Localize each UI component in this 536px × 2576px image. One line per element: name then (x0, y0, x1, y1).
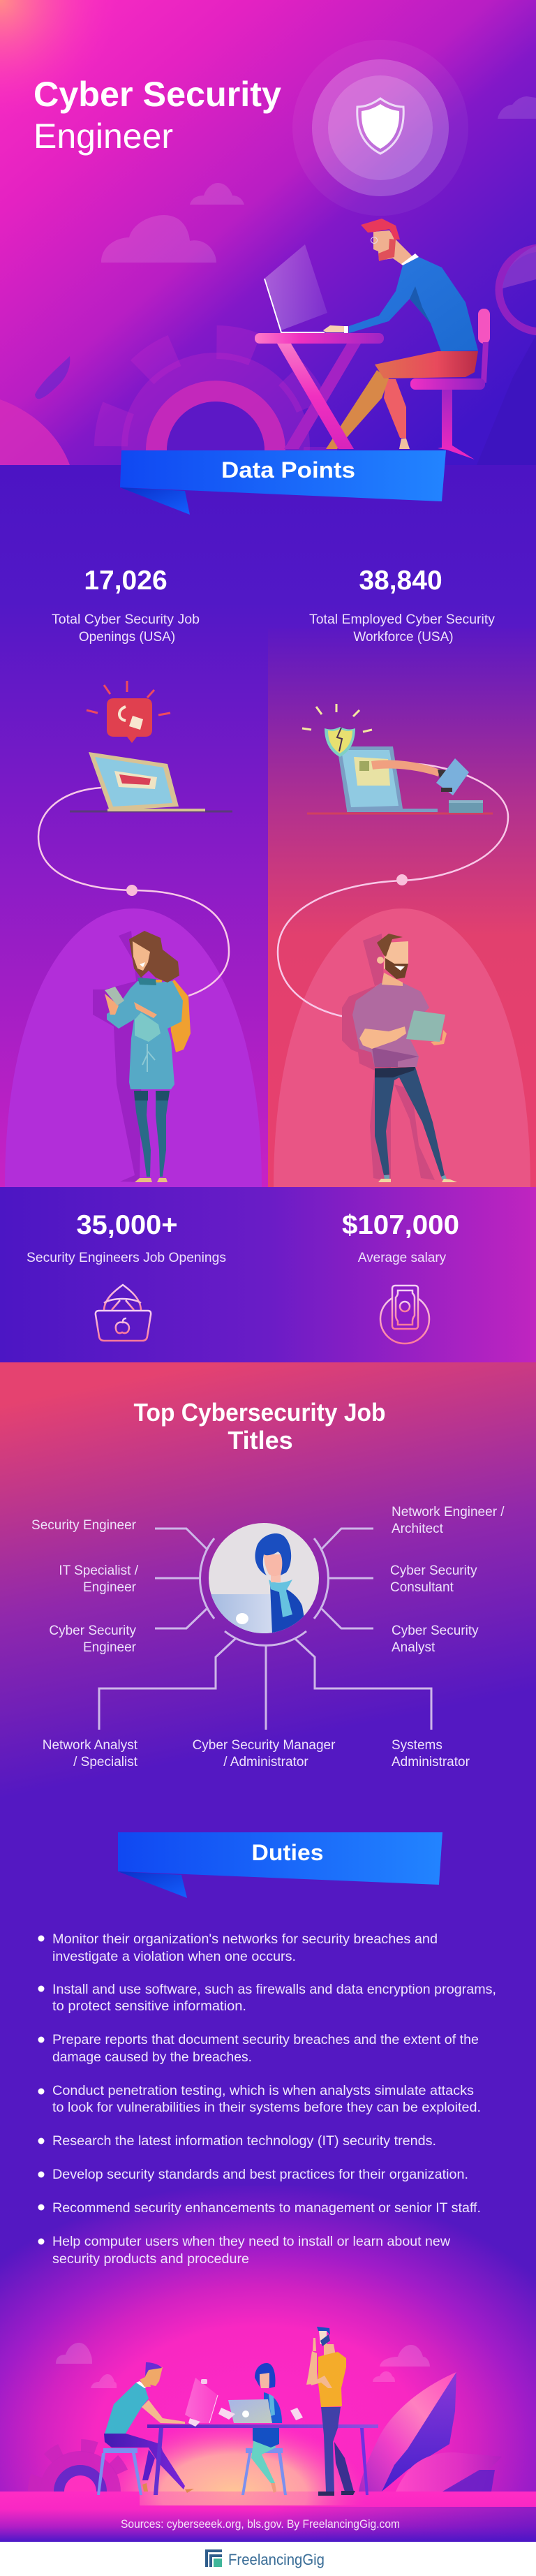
stat: security engineers openings: 35,000+ (77, 1210, 177, 1240)
stat: average salary (342, 1210, 459, 1265)
portrait: woman at laptop in circle (209, 1523, 319, 1634)
labels: bottom job titles (43, 1738, 470, 1769)
duties list: damage caused by the breaches. (52, 2050, 252, 2065)
title: Cyber Security (34, 75, 281, 114)
chair (410, 309, 490, 459)
labels: bottom job titles: Systems (392, 1738, 442, 1753)
table top and legs (147, 2424, 378, 2495)
icon: money on phone (380, 1286, 429, 1344)
heading: top job titles: Top Cybersecurity Job (134, 1398, 385, 1427)
floating papers (188, 2408, 303, 2427)
clouds (101, 96, 536, 263)
duties list: to look for vulnerabilities in their systems before they can be exploited. (52, 2100, 481, 2115)
stat: average salary: Average salary (358, 1251, 447, 1265)
stat: total job openings: Openings (USA) (79, 630, 175, 645)
section background: hero (0, 0, 536, 465)
labels: right job titles: Network Engineer / (392, 1505, 505, 1519)
section background: stats band (0, 1187, 536, 1362)
sources line: Sources: cyberseeek.org, bls.gov. By FreelancingGig.com (121, 2517, 400, 2531)
man body (323, 219, 478, 378)
connector curves with nodes (38, 764, 508, 1018)
illustration: laptop with alert (70, 752, 232, 811)
duties list: to protect sensitive information. (52, 1999, 246, 2014)
arch backgrounds (5, 908, 530, 1187)
labels: right job titles: Analyst (392, 1640, 436, 1655)
labels: right job titles (390, 1505, 505, 1655)
labels: bottom job titles: Network Analyst (43, 1738, 138, 1753)
icon: hooded hacker behind laptop (96, 1285, 151, 1341)
labels: left job titles (31, 1518, 139, 1655)
labels: bottom job titles: / Specialist (73, 1755, 138, 1769)
stat: average salary: $107,000 (342, 1210, 459, 1240)
illustration: man working at laptop (255, 219, 490, 459)
illustration: man with tablet (342, 934, 457, 1182)
floating screen (185, 2378, 218, 2423)
duties list: Install and use software, such as firewalls and data encryption programs, (52, 1982, 496, 1997)
stat: total employed workforce: 38,840 (359, 566, 442, 596)
footer ground (0, 2492, 536, 2542)
background gears and arcs (0, 246, 536, 552)
standing man (306, 2327, 355, 2496)
labels: bottom job titles: Cyber Security Manager (193, 1738, 336, 1753)
icon: shield in concentric circles (292, 40, 468, 216)
labels: right job titles: Consultant (390, 1580, 454, 1595)
stat: security engineers openings: Security Engineers Job Openings (27, 1251, 226, 1265)
logo: FreelancingGig: FreelancingGig (228, 2551, 325, 2568)
footer white strip (0, 2542, 536, 2576)
title: Engineer (34, 117, 173, 156)
icon: hacked padlock alert (87, 681, 170, 743)
duties list: Conduct penetration testing, which is when analysts simulate attacks (52, 2084, 474, 2098)
duties list: security products and procedure (52, 2252, 249, 2267)
banner: Data Points: Data Points (221, 457, 355, 483)
illustration: hacker arm stealing data from laptop (307, 746, 493, 814)
stat: security engineers openings (27, 1210, 226, 1265)
stat: total job openings: Total Cyber Security Job (52, 612, 200, 627)
laptop (265, 244, 327, 332)
stat: total job openings: 17,026 (84, 566, 168, 596)
stat: total employed workforce: Workforce (USA) (353, 630, 454, 645)
footer gear (44, 2439, 128, 2492)
icon: broken shield with rays (302, 704, 372, 757)
heading: top job titles: Titles (228, 1426, 293, 1455)
illustration: woman with phone and backpack (93, 931, 191, 1182)
duties list: Recommend security enhancements to management or senior IT staff. (52, 2201, 481, 2216)
duties list: Research the latest information technology (IT) security trends. (52, 2134, 436, 2149)
labels: left job titles: Security Engineer (31, 1518, 137, 1533)
section background: job titles (0, 1362, 536, 1823)
labels: left job titles: Engineer (83, 1580, 137, 1595)
labels: bottom job titles: / Administrator (223, 1755, 308, 1769)
labels: bottom job titles: Administrator (392, 1755, 470, 1769)
connector lines (99, 1529, 431, 1730)
heading: top job titles (134, 1398, 385, 1455)
stat: total employed workforce: Total Employed Cyber Security (309, 612, 496, 627)
seated man (97, 2362, 194, 2495)
banner: Duties (118, 1832, 442, 1898)
section background: duties (0, 1823, 536, 2542)
labels: right job titles: Cyber Security (390, 1563, 477, 1578)
duties list: investigate a violation when one occurs. (52, 1950, 296, 1964)
labels: left job titles: IT Specialist / (59, 1563, 139, 1578)
duties list: Develop security standards and best practices for their organization. (52, 2167, 468, 2182)
footer clouds (56, 2343, 430, 2388)
labels: left job titles: Cyber Security (49, 1624, 136, 1638)
illustration: team at table (97, 2327, 378, 2496)
duties list (38, 1932, 496, 2267)
duties list: Monitor their organization's networks for security breaches and (52, 1932, 438, 1947)
seated woman (228, 2363, 287, 2495)
duties list: Prepare reports that document security breaches and the extent of the (52, 2033, 479, 2047)
stat: total employed workforce (309, 566, 496, 645)
footer scene background (0, 2186, 536, 2542)
banner: Data Points (120, 450, 446, 515)
banner: Duties: Duties (251, 1840, 324, 1865)
labels: left job titles: Engineer (83, 1640, 137, 1655)
footer leaves (359, 2372, 502, 2492)
title (34, 75, 281, 156)
duties list: Help computer users when they need to install or learn about new (52, 2235, 450, 2249)
stat: total job openings (52, 566, 200, 645)
section background: data points (0, 465, 536, 1187)
desk (255, 333, 410, 449)
labels: right job titles: Cyber Security (392, 1624, 479, 1638)
labels: right job titles: Architect (392, 1522, 444, 1536)
